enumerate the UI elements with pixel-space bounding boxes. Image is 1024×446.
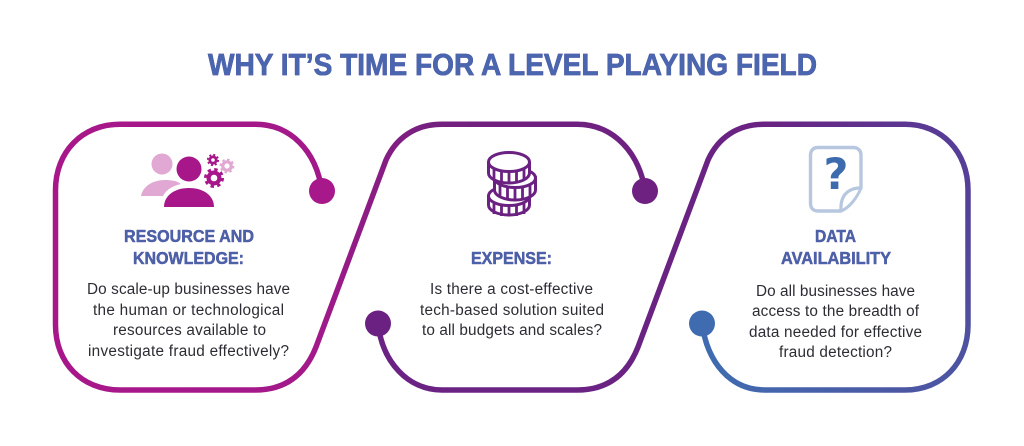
text block: expense question: tech-based solution suited xyxy=(420,302,604,319)
text block: resource question xyxy=(87,281,290,360)
heading: resource and knowledge: KNOWLEDGE: xyxy=(133,248,244,268)
text block: resource question: Do scale-up businesses have xyxy=(87,281,290,298)
title: WHY IT’S TIME FOR A LEVEL PLAYING FIELD xyxy=(208,48,817,82)
panel: resource and knowledge xyxy=(87,154,290,360)
text block: data question: access to the breadth of xyxy=(752,303,920,320)
heading: resource and knowledge xyxy=(124,226,254,268)
heading: resource and knowledge: RESOURCE AND xyxy=(124,226,254,246)
text block: expense question: to all budgets and scales? xyxy=(422,322,602,339)
text block: expense question: Is there a cost-effective xyxy=(430,281,593,298)
text block: data question: data needed for effective xyxy=(749,324,922,341)
text block: data question xyxy=(749,283,922,361)
heading: data availability: AVAILABILITY xyxy=(781,248,891,268)
text block: resource question: investigate fraud effectively? xyxy=(88,343,289,360)
text block: resource question: the human or technological xyxy=(93,302,284,319)
heading: data availability: DATA xyxy=(815,226,856,246)
text block: data question: Do all businesses have xyxy=(756,283,915,300)
icon: document with question mark: ? xyxy=(824,150,848,200)
heading: data availability xyxy=(781,226,891,268)
panel: expense xyxy=(420,152,604,339)
heading: expense: EXPENSE: xyxy=(471,248,552,268)
text block: resource question: resources available to xyxy=(113,322,266,339)
panel: data availability xyxy=(749,148,922,361)
icon: coin stack xyxy=(488,152,536,216)
icon: document with question mark xyxy=(810,148,861,211)
text block: expense question xyxy=(420,281,604,339)
panel outline: expense and data connector xyxy=(365,124,968,390)
text block: data question: fraud detection? xyxy=(779,344,892,361)
icon: people with gears xyxy=(141,154,233,207)
panel outline: resource and expense connector xyxy=(56,124,658,390)
